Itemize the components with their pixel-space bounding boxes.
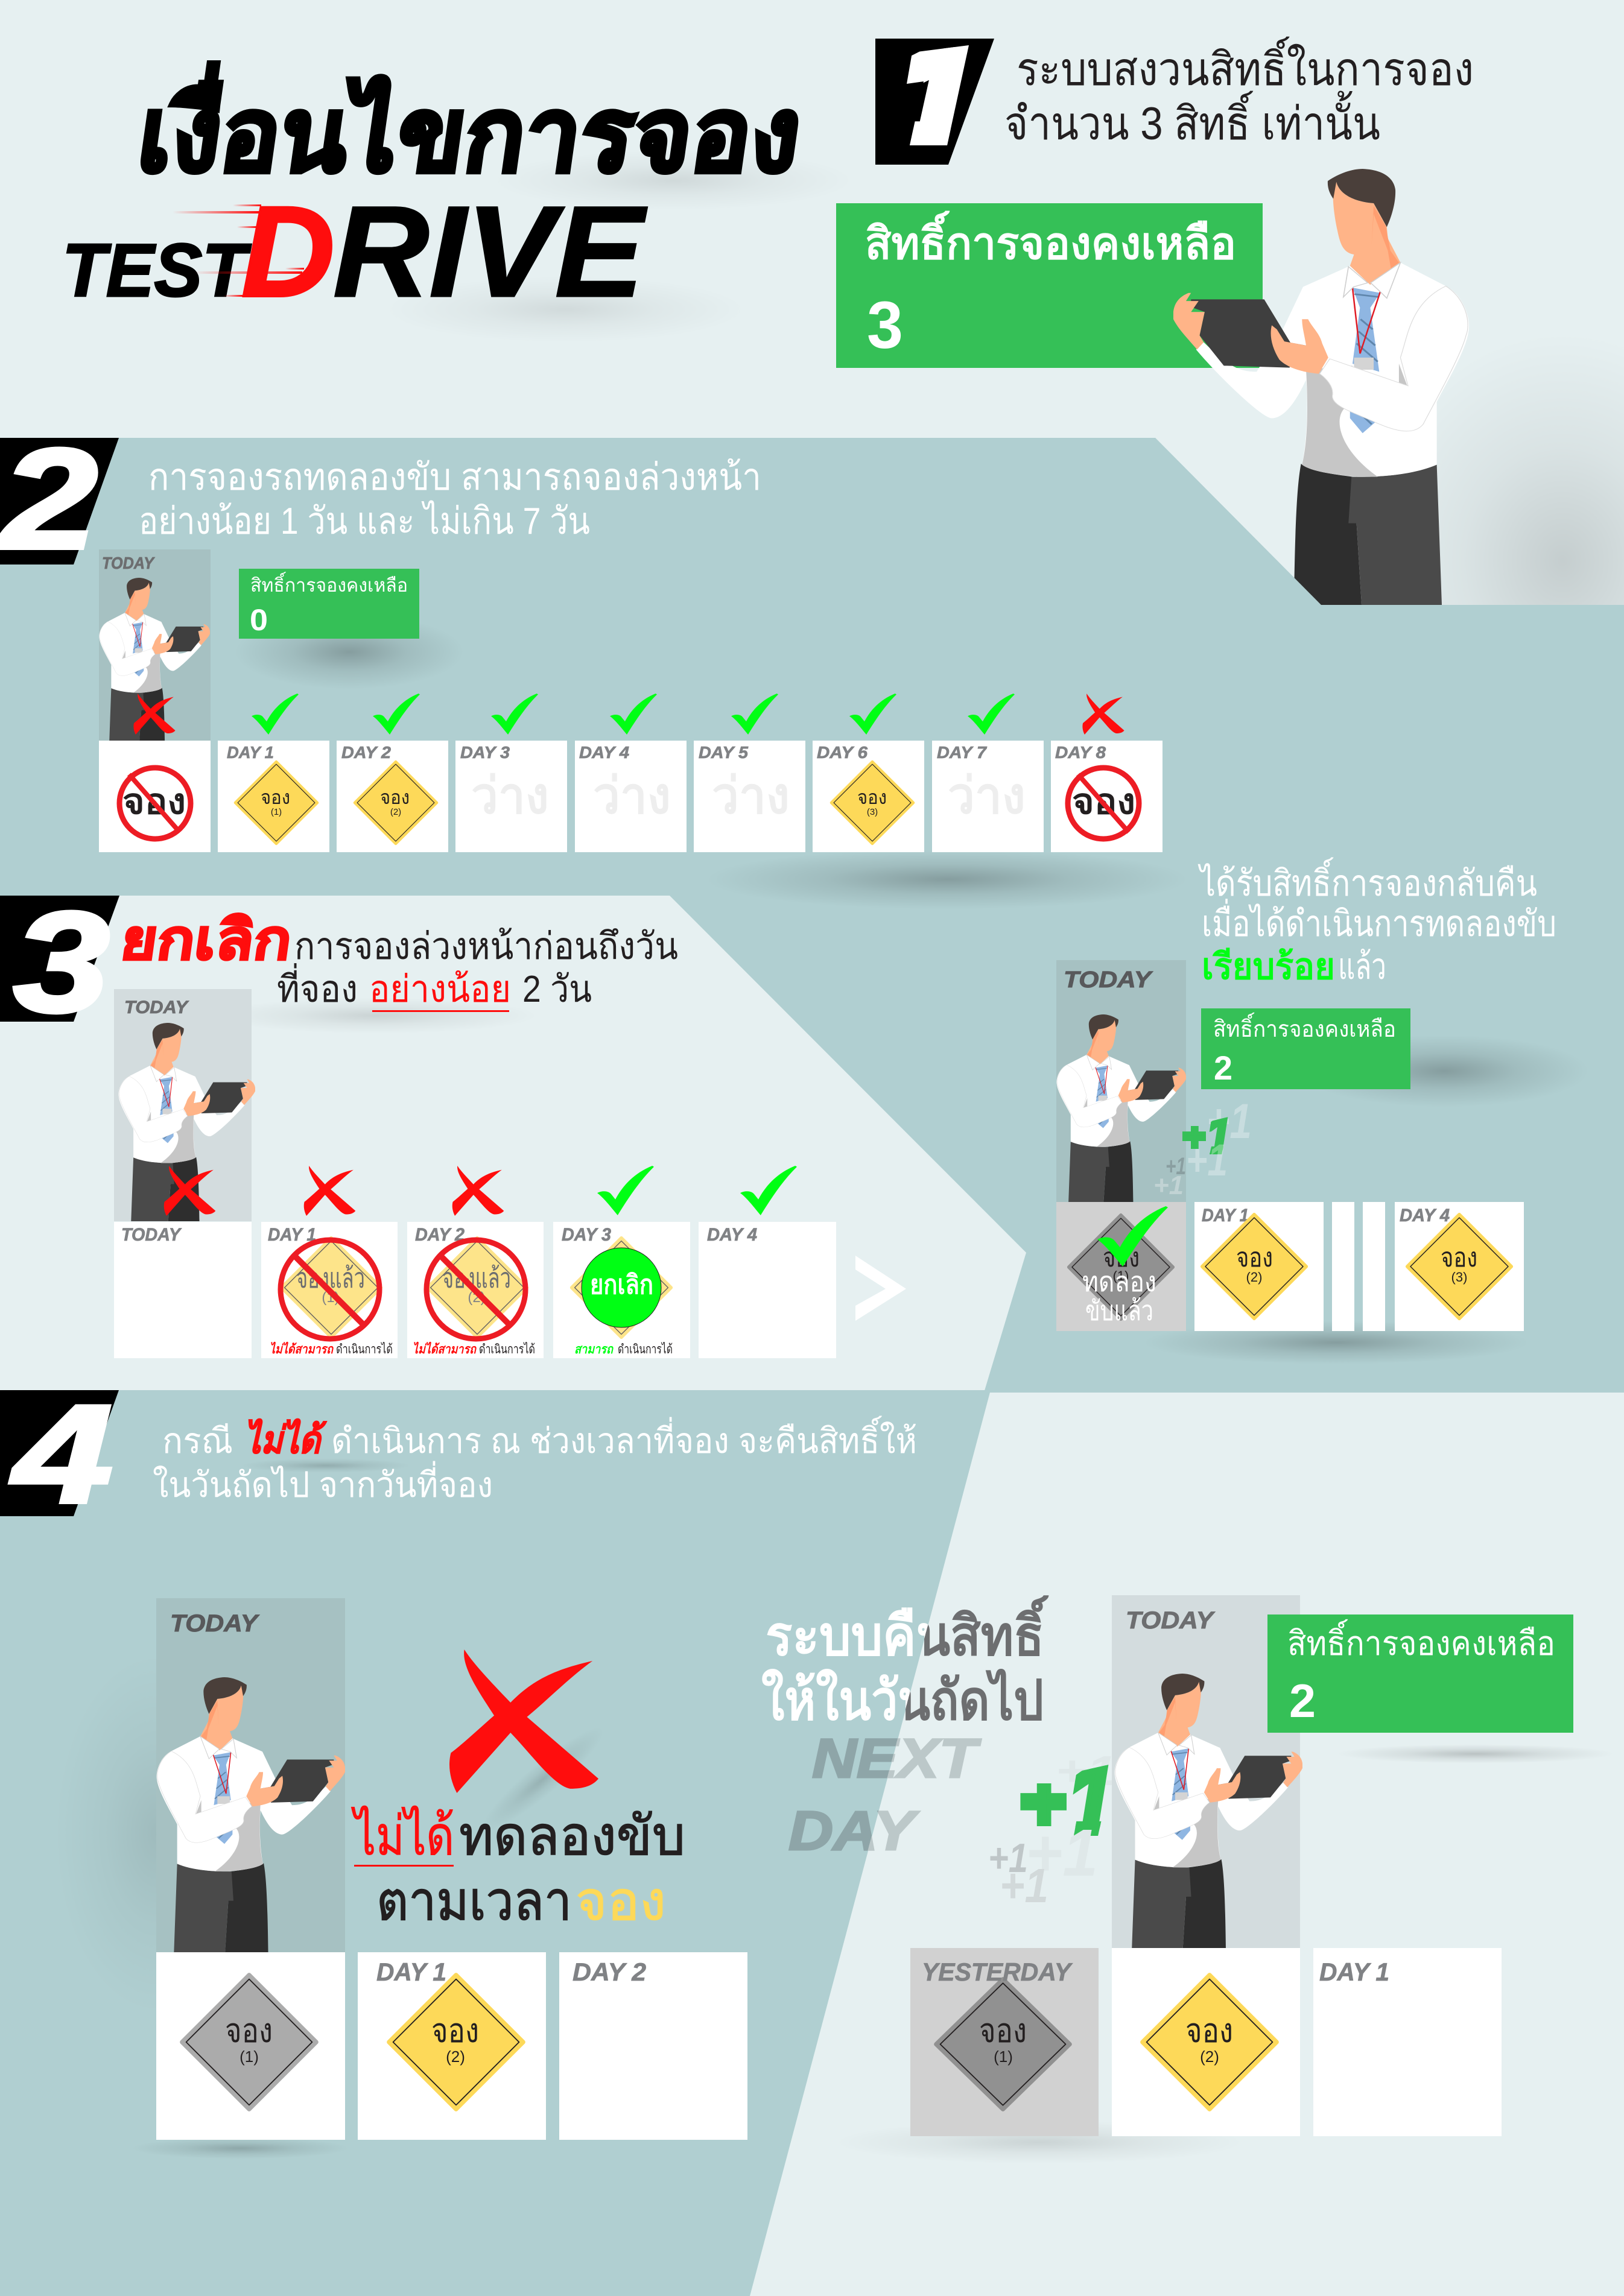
system returns right text: ระบบคืนสิทธิ์: [766, 1595, 1049, 1667]
card: day 1 cannot cancel: จองแล้ว: [296, 1262, 365, 1294]
card: day 2 cannot cancel: DAY 2: [415, 1225, 465, 1245]
card: tested today: จอง: [1103, 1243, 1140, 1273]
status box: 2 remaining: สิทธิ์การจองคงเหลือ: [1287, 1619, 1555, 1662]
card: tested today: (1): [1113, 1268, 1129, 1283]
card: today missed: [156, 1952, 345, 2140]
status box: 0 remaining: [239, 569, 419, 639]
plus one marks: +1: [1018, 1744, 1114, 1858]
arrow: chevron: [855, 1256, 906, 1321]
section 3 text: อย่างน้อย: [369, 969, 511, 1010]
card: today: จอง: [1185, 2011, 1233, 2049]
section 4 text: ไม่ได้: [244, 1418, 327, 1461]
card: day 4 free: DAY 4: [579, 743, 629, 762]
plus one marks: [1155, 1104, 1250, 1194]
returned right text: [1198, 857, 1556, 987]
card: day 4: DAY 4: [707, 1225, 757, 1245]
status box: 2 remaining: [1201, 1008, 1410, 1089]
card: day 2 cannot cancel: [407, 1222, 544, 1358]
section 1 text: [1004, 36, 1474, 150]
today column with man: [99, 549, 211, 741]
card: day 1 booked: จอง: [261, 786, 290, 808]
card: day 6 booked: (3): [867, 807, 878, 817]
card: today: TODAY: [121, 1225, 182, 1245]
soft shadows on light background: [384, 150, 1624, 790]
plus one marks: +1: [1026, 1816, 1098, 1890]
status box: 2 remaining: [1267, 1614, 1573, 1733]
card: day 4: จอง: [1441, 1243, 1477, 1273]
plus one marks: +1: [1166, 1153, 1186, 1180]
card: day 3 can cancel: DAY 3: [562, 1225, 611, 1245]
card: day 2 cannot cancel: (2): [468, 1289, 486, 1306]
plus one marks: +1: [1153, 1171, 1184, 1200]
logo: TEST DRIVE: TEST: [62, 229, 252, 312]
card: tested today: [1056, 1202, 1186, 1331]
logo: TEST DRIVE: [62, 180, 647, 324]
availability marks row: [133, 694, 1124, 735]
section 3 text: การจองล่วงหน้าก่อนถึงวัน: [294, 926, 678, 967]
card: day 7 free: ว่าง: [948, 767, 1026, 824]
missed test drive text: จอง: [576, 1871, 666, 1932]
plus one marks: +1: [1186, 1135, 1228, 1185]
card: yesterday: YESTERDAY: [922, 1958, 1073, 1986]
next day text: NEXT: [812, 1728, 982, 1789]
section 1 number badge: [875, 39, 994, 165]
status box: 0 remaining: สิทธิ์การจองคงเหลือ: [250, 571, 408, 596]
card: day 2 booked: (2): [390, 807, 401, 817]
today column with man: [1056, 960, 1186, 1202]
card: day 1 cannot cancel: [261, 1222, 398, 1358]
title: เงื่อนไขการจอง: เงื่อนไขการจอง: [132, 62, 810, 193]
section 3 number badge: 3: [13, 882, 110, 1042]
section 2 text: อย่างน้อย 1 วัน และ ไม่เกิน 7 วัน: [139, 500, 590, 542]
card: tested today: ขับแล้ว: [1085, 1295, 1153, 1326]
card: day 4 free: [575, 741, 687, 852]
plus one marks: +1: [988, 1835, 1028, 1881]
card: day 8 cannot book: [1051, 741, 1162, 852]
card: tested today: ทดลอง: [1082, 1266, 1156, 1297]
section 4 number badge: [0, 1376, 119, 1532]
missed test drive text: ทดลองขับ: [459, 1806, 685, 1867]
section 2 text: การจองรถทดลองขับ สามารถจองล่วงหน้า: [148, 457, 761, 498]
card: day 2 cannot cancel: จองแล้ว: [442, 1262, 511, 1294]
status box: 3 remaining: 3: [867, 288, 903, 362]
logo: TEST DRIVE: RIVE: [333, 180, 647, 324]
section 3 text: 2 วัน: [522, 969, 592, 1010]
light panel: section 3: [0, 896, 1026, 1393]
card: day 1 booked: DAY 1: [227, 743, 274, 762]
card: day 4 free: ว่าง: [593, 767, 671, 824]
card: day 1 cannot cancel: DAY 1: [268, 1225, 316, 1245]
teal panel: section 4: [0, 1390, 991, 2296]
missed test drive text: ไม่ได้: [351, 1806, 454, 1867]
section 1 number badge: 1: [893, 16, 984, 176]
next day text: [788, 1728, 982, 1862]
status box: 2 remaining: 2: [1214, 1049, 1232, 1087]
status box: 2 remaining: 2: [1289, 1674, 1316, 1727]
big red cross: [449, 1649, 598, 1793]
card: day 6 booked: [813, 741, 924, 852]
returned right text: แล้ว: [1338, 946, 1386, 987]
system returns right text: [761, 1595, 1049, 1731]
card: day 4: (3): [1451, 1270, 1467, 1285]
card: day 3 free: [455, 741, 567, 852]
card: day 1: DAY 1: [376, 1958, 446, 1986]
card: day 5 free: ว่าง: [712, 767, 790, 824]
section 1 text: ระบบสงวนสิทธิ์ในการจอง: [1017, 36, 1474, 95]
card: day 1: [1313, 1948, 1502, 2136]
status box: 2 remaining: สิทธิ์การจองคงเหลือ: [1213, 1012, 1396, 1042]
section 3 text: [117, 908, 678, 1012]
card: day 3 free: ว่าง: [471, 767, 549, 824]
today column with man: TODAY: [170, 1610, 260, 1637]
status box: 0 remaining: 0: [250, 603, 268, 637]
illustration: man with tablet: [1155, 169, 1469, 605]
plus one marks: [991, 1765, 1109, 1902]
section 3 text: ยกเลิก: [117, 908, 296, 971]
returned right text: ได้รับสิทธิ์การจองกลับคืน: [1198, 857, 1537, 903]
section 2 number badge: 2: [0, 419, 98, 579]
section 1 text: จำนวน 3 สิทธิ์ เท่านั้น: [1004, 90, 1380, 150]
section 2 number badge: [0, 419, 119, 579]
status box: 3 remaining: สิทธิ์การจองคงเหลือ: [865, 210, 1236, 268]
card: day 4: [1395, 1202, 1524, 1331]
next day text: DAY: [788, 1800, 920, 1862]
card: day 7 free: [932, 741, 1044, 852]
card slivers: [1332, 1202, 1385, 1331]
card: today: [114, 1222, 252, 1358]
today column with man: TODAY: [102, 554, 155, 572]
card: today, cannot book: [99, 741, 211, 852]
system returns right text: ให้ในวันถัดไป: [761, 1669, 1044, 1731]
today column with man: [156, 1598, 345, 1952]
today column with man: [1112, 1595, 1302, 1948]
card: day 1 booked: (1): [271, 807, 282, 817]
card: day 6 booked: จอง: [857, 786, 887, 808]
card: day 3 free: DAY 3: [460, 743, 510, 762]
card: day 1 booked: [218, 741, 329, 852]
card: day 3 can cancel: สามารถ: [574, 1342, 614, 1356]
section 4 text: ดำเนินการ ณ ช่วงเวลาที่จอง จะคืนสิทธิ์ให้: [331, 1415, 917, 1461]
section 4 number badge: 4: [10, 1376, 113, 1532]
card: day 1: DAY 1: [1319, 1958, 1389, 1986]
card: yesterday: จอง: [979, 2011, 1027, 2049]
card: day 2 booked: [337, 741, 448, 852]
card: day 1: จอง: [1236, 1243, 1273, 1273]
card: day 2 booked: DAY 2: [341, 743, 391, 762]
card: today, cannot book: จอง: [122, 782, 186, 821]
plus one marks: +1: [1000, 1859, 1048, 1912]
card: day 5 free: [694, 741, 805, 852]
card: day 1: [358, 1952, 546, 2140]
card: day 3 can cancel: ยกเลิก: [590, 1270, 653, 1300]
card: day 2 cannot cancel: ไม่ได้สามารถ: [413, 1341, 477, 1356]
card: yesterday: [910, 1948, 1099, 2136]
today column with man: TODAY: [1064, 967, 1153, 993]
card: day 4: DAY 4: [1400, 1206, 1450, 1225]
missed test drive text: ตามเวลา: [376, 1871, 572, 1932]
card: day 1: [1194, 1202, 1324, 1331]
shadows in section 4: [54, 998, 1614, 2164]
section 2 text: [139, 457, 761, 542]
section 3 text: ที่จอง: [277, 963, 358, 1010]
card: day 8 cannot book: จอง: [1072, 782, 1135, 821]
plus one marks: +1: [1056, 1747, 1116, 1794]
card: day 2: [559, 1952, 747, 2140]
today column with man: TODAY: [124, 998, 189, 1017]
card: today: [1112, 1948, 1300, 2136]
returned right text: เรียบร้อย: [1202, 946, 1335, 987]
card: day 3 can cancel: ดำเนินการได้: [618, 1342, 673, 1356]
card: day 5 free: DAY 5: [699, 743, 748, 762]
availability marks row: [164, 1166, 797, 1216]
card: day 1: (2): [1246, 1270, 1262, 1285]
today column with man: [114, 989, 255, 1221]
card: day 2 cannot cancel: ดำเนินการได้: [479, 1342, 535, 1356]
section 4 text: กรณี: [162, 1422, 233, 1461]
returned right text: เมื่อได้ดำเนินการทดลองขับ: [1202, 899, 1556, 944]
section 4 text: [153, 1415, 917, 1505]
card: day 1 cannot cancel: ไม่ได้สามารถ: [270, 1341, 334, 1356]
plus one marks: +1: [1207, 1094, 1252, 1149]
card: day 3 can cancel: [553, 1222, 690, 1358]
card: day 2: DAY 2: [573, 1958, 646, 1986]
status box: 3 remaining: [836, 203, 1263, 368]
logo: TEST DRIVE: D: [241, 180, 335, 324]
plus one marks: +1: [1181, 1106, 1231, 1166]
card: day 2 booked: จอง: [380, 786, 410, 808]
card: day 6 booked: DAY 6: [817, 743, 868, 762]
card: day 1 cannot cancel: (1): [322, 1289, 340, 1306]
card: day 4: [699, 1222, 836, 1358]
missed test drive text: [351, 1806, 685, 1932]
card: day 1: DAY 1: [1202, 1206, 1249, 1225]
section 3 number badge: [0, 882, 119, 1042]
shadows on teal band: [235, 615, 1589, 1364]
card: yesterday: (1): [994, 2048, 1013, 2066]
teal band: sections 2 and 3: [0, 438, 1624, 1393]
card: day 1: (2): [446, 2048, 465, 2066]
card: today missed: จอง: [225, 2011, 273, 2049]
card: today missed: (1): [239, 2048, 259, 2066]
card: day 1 cannot cancel: ดำเนินการได้: [336, 1342, 393, 1356]
card: day 8 cannot book: DAY 8: [1055, 743, 1106, 762]
card: today: (2): [1200, 2048, 1219, 2066]
speed lines: [173, 204, 304, 297]
card: day 1: จอง: [431, 2011, 479, 2049]
card: day 7 free: DAY 7: [937, 743, 987, 762]
section 4 text: ในวันถัดไป จากวันที่จอง: [153, 1461, 493, 1505]
today column with man: TODAY: [1126, 1607, 1216, 1634]
